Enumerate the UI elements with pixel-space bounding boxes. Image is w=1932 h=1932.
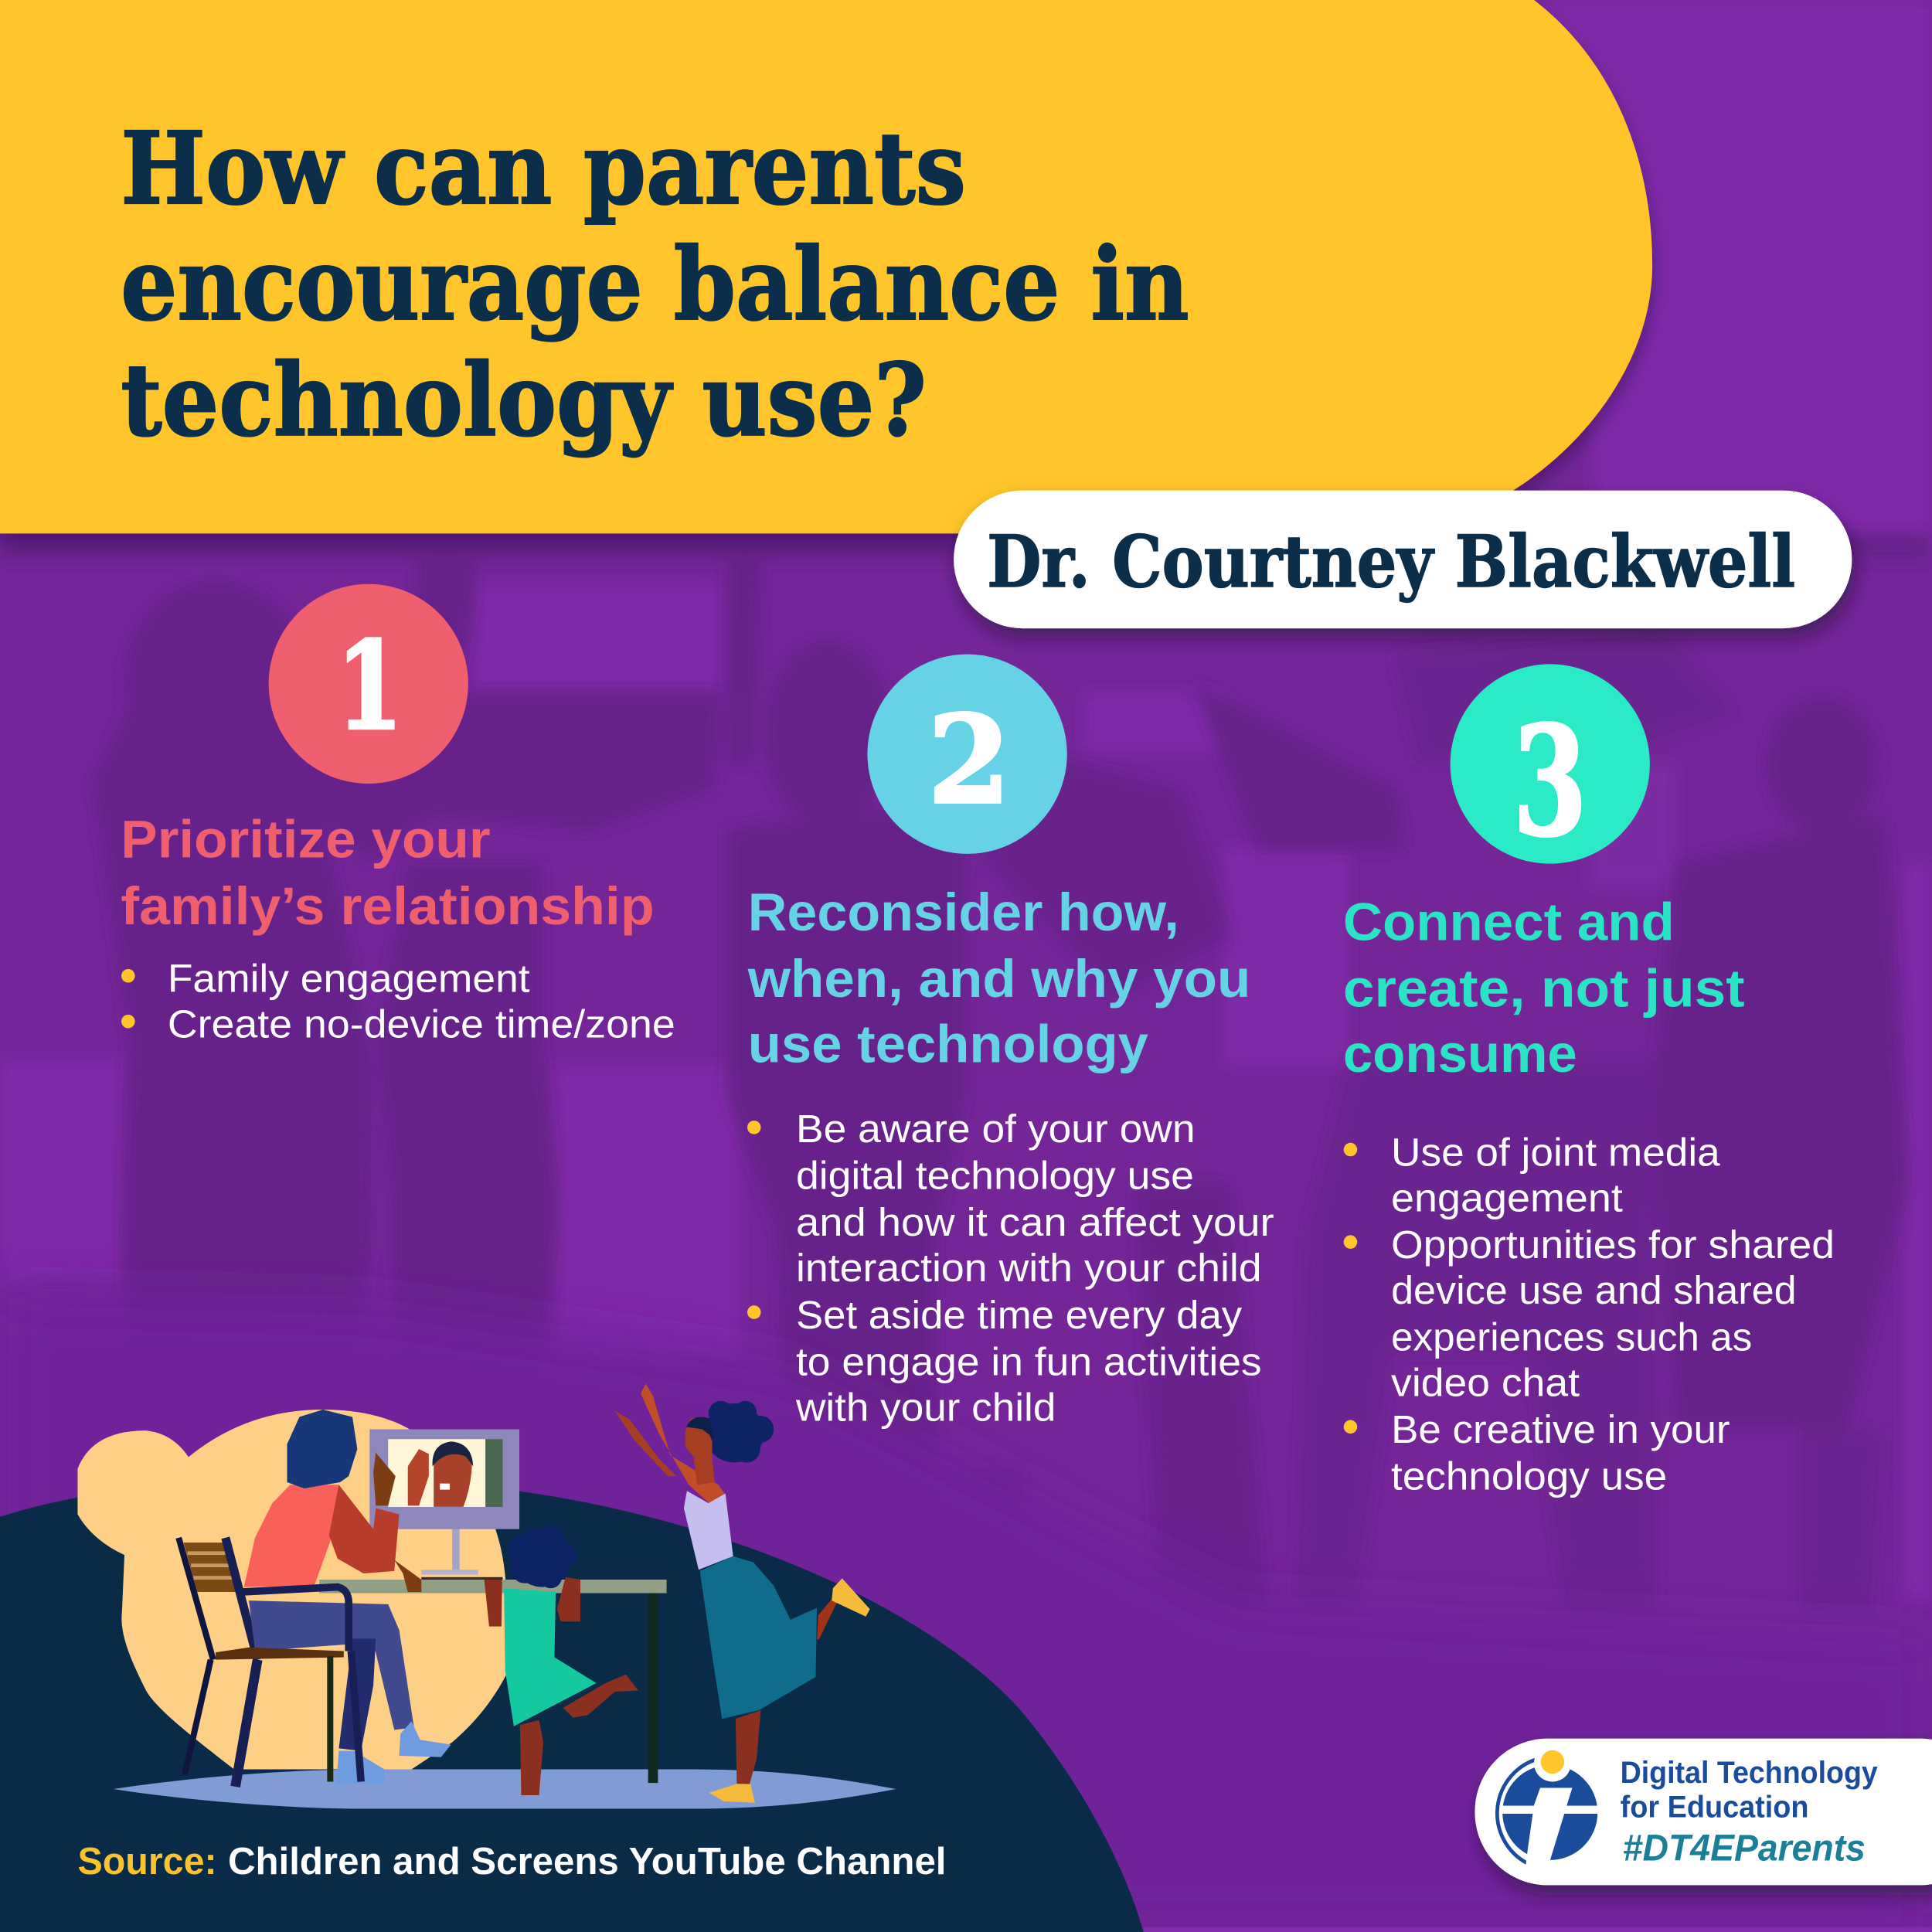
bullet list 2: interaction with your child (796, 1246, 1262, 1290)
bullet list 3: video chat (1391, 1360, 1580, 1404)
heading 1 (121, 810, 655, 936)
heading 1: Prioritize your (121, 810, 491, 869)
mother (244, 1410, 451, 1784)
bullet list 2 (747, 1107, 1274, 1429)
logo text: #DT4EParents (1623, 1828, 1866, 1869)
heading 2 (747, 883, 1250, 1073)
illustration: family at video call (77, 1383, 896, 1809)
panel: step 1 (121, 584, 675, 1046)
number badge 1 (269, 584, 468, 784)
logo mark (1497, 1745, 1600, 1868)
heading 3: consume (1343, 1024, 1577, 1083)
bullet list 2: with your child (795, 1385, 1056, 1429)
dancing woman (615, 1383, 870, 1803)
chair back (179, 1538, 257, 1660)
logo text: Digital Technology (1621, 1756, 1878, 1790)
monitor (369, 1429, 519, 1575)
bullet list 3: device use and shared (1391, 1268, 1797, 1312)
heading 2: when, and why you (747, 949, 1250, 1009)
panel: step 2 (747, 655, 1274, 1429)
bullet list 3: engagement (1391, 1175, 1623, 1219)
number badge 3: 3 (1513, 692, 1587, 869)
title: technology use? (121, 342, 927, 459)
bullet list 3: experiences such as (1391, 1315, 1752, 1359)
logo panel (1475, 1739, 1932, 1885)
number badge 2: 2 (928, 689, 1010, 831)
heading 2: Reconsider how, (748, 883, 1179, 942)
chair seat and legs (185, 1587, 361, 1787)
navy ground hill (0, 1478, 1144, 1932)
cream blob (77, 1410, 506, 1770)
bullet list 1: Create no-device time/zone (168, 1002, 675, 1046)
source line: Source: (77, 1840, 217, 1883)
child (485, 1526, 638, 1795)
heading 3: Connect and (1343, 893, 1675, 952)
bullet list 1 (121, 956, 675, 1046)
author name pill (954, 491, 1852, 628)
bullet list 2: Be aware of your own (796, 1107, 1196, 1151)
bullet list 3: Be creative in your (1391, 1407, 1730, 1451)
bullet list 3: technology use (1391, 1454, 1667, 1498)
number badge 1: 1 (336, 614, 403, 757)
bullet list 3: Use of joint media (1391, 1130, 1720, 1174)
number badge 3 (1451, 664, 1650, 869)
title banner (0, 0, 1652, 533)
bullet list 2: and how it can affect your (796, 1200, 1274, 1244)
heading 1: family’s relationship (121, 876, 655, 936)
number badge 2 (867, 655, 1067, 854)
heading 2: use technology (748, 1014, 1148, 1073)
bullet list 3: Opportunities for shared (1391, 1223, 1835, 1267)
title (121, 111, 1189, 459)
bullet list 2: to engage in fun activities (796, 1339, 1262, 1383)
title: How can parents (121, 111, 966, 227)
heading 3: create, not just (1343, 959, 1745, 1019)
logo text: for Education (1621, 1791, 1809, 1825)
bullet list 3 (1344, 1130, 1835, 1498)
floor ellipse (114, 1770, 896, 1809)
title: encourage balance in (121, 226, 1189, 343)
logo text (1621, 1756, 1878, 1869)
author name pill: Dr. Courtney Blackwell (987, 519, 1795, 604)
bullet list 2: Set aside time every day (796, 1293, 1243, 1337)
source line: Children and Screens YouTube Channel (228, 1840, 946, 1883)
bullet list 2: digital technology use (796, 1154, 1194, 1198)
bullet list 1: Family engagement (168, 956, 530, 1000)
heading 3 (1343, 893, 1745, 1083)
table (319, 1577, 667, 1783)
panel: step 3 (1343, 664, 1835, 1498)
